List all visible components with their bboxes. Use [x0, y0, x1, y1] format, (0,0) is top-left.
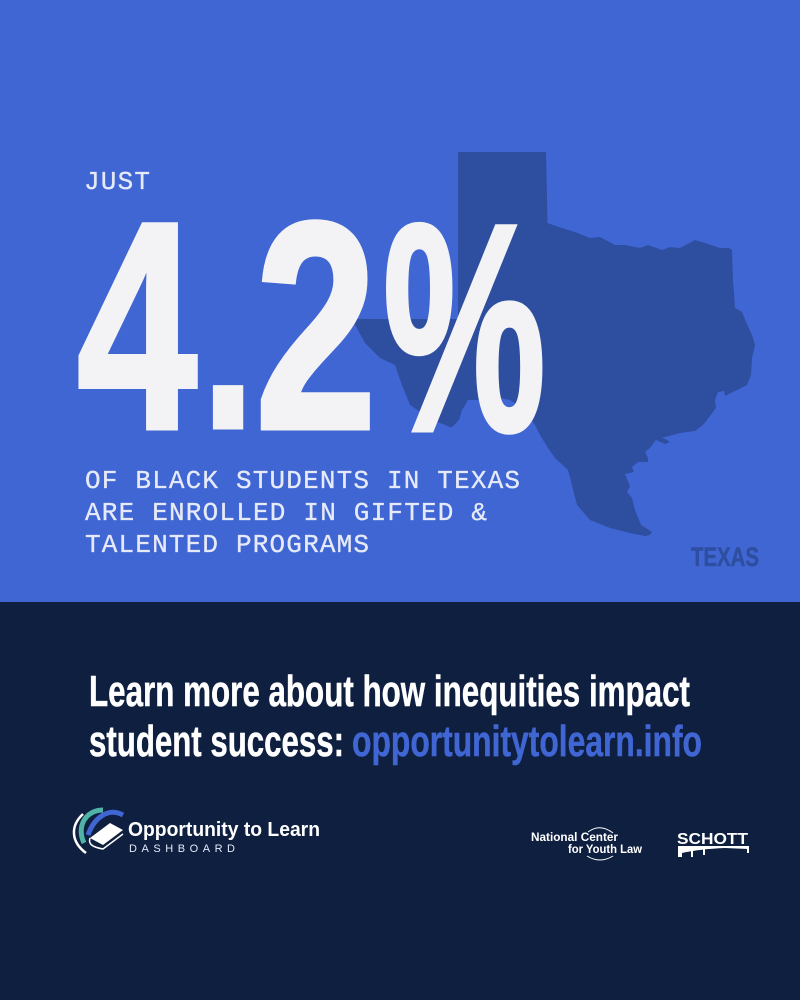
wordmark: Opportunity to Learn	[128, 819, 320, 841]
logo: Opportunity to Learn Dashboard	[74, 810, 320, 855]
text: statistic description	[85, 466, 520, 560]
text: just: JUST	[84, 167, 150, 197]
icon: open book with arcs	[74, 810, 123, 853]
logo: National Center for Youth Law: National Center	[531, 832, 619, 844]
logo: Schott	[677, 831, 748, 857]
logo: National Center for Youth Law: for Youth Law	[568, 844, 642, 856]
panel: navy call to action panel	[0, 602, 800, 1000]
call to action heading	[89, 667, 702, 766]
call to action heading: student success:	[89, 717, 344, 766]
label: Texas: TEXAS	[691, 542, 759, 572]
logo: National Center for Youth Law	[531, 828, 642, 860]
panel: blue statistic panel	[0, 0, 800, 602]
text: statistic description: ARE ENROLLED IN GIFTED &	[85, 498, 487, 528]
text: statistic description: OF BLACK STUDENTS IN TEXAS	[85, 466, 520, 496]
big statistic: 4.2%: %	[383, 164, 546, 494]
big statistic: 4.2%	[77, 161, 546, 494]
wordmark subtitle: DASHBOARD	[129, 843, 235, 855]
big statistic: 4.2%: .	[199, 165, 257, 491]
big statistic: 4.2%: 4	[77, 161, 198, 491]
logo: Schott: SCHOTT	[677, 831, 748, 848]
big statistic: 4.2%: 2	[255, 162, 377, 492]
text: statistic description: TALENTED PROGRAMS	[85, 530, 369, 560]
map: Texas silhouette	[352, 152, 755, 536]
